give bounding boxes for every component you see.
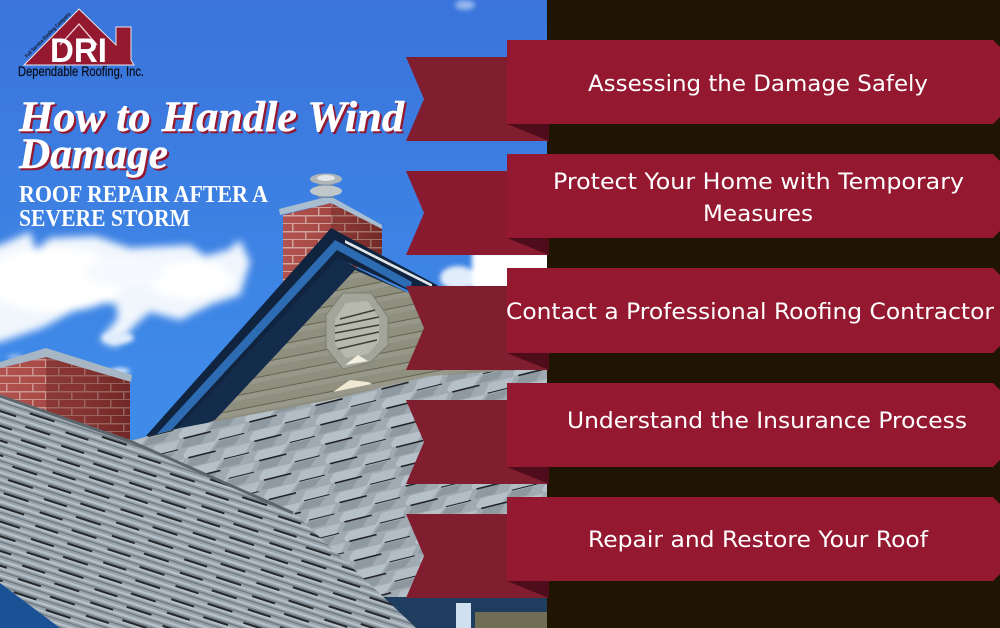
cloud: right of gable [436, 255, 547, 286]
dark right background [547, 0, 1000, 628]
subtitle [19, 182, 269, 232]
ribbon 2: Protect Your Home with Temporary Measures: Measures [703, 202, 813, 227]
chimney: main [279, 174, 382, 282]
logo inner outline [60, 24, 97, 45]
title shadow: How to Handle Wind [20, 96, 408, 143]
gable soffit [176, 258, 408, 429]
logo company name: Dependable Roofing, Inc. [18, 63, 144, 79]
roof: left shingles [0, 395, 416, 628]
title [18, 94, 408, 180]
title shadow [20, 96, 408, 180]
subtitle: ROOF REPAIR AFTER A [19, 182, 269, 208]
ribbon 5: Repair and Restore Your Roof: Repair and Restore Your Roof [588, 528, 929, 553]
wall light patch [333, 380, 372, 392]
logo letters: DRI [50, 32, 107, 70]
ribbon 3: Contact a Professional Roofing Contractor: Contact a Professional Roofing Contractor [506, 300, 995, 325]
ribbon 1: Assessing the Damage Safely [406, 40, 1000, 141]
gable vent [326, 293, 388, 369]
ribbon 2: Protect Your Home with Temporary Measures [406, 154, 1000, 255]
title text: How to Handle Wind [18, 94, 406, 141]
sky [0, 0, 547, 514]
ribbon 1: Assessing the Damage Safely: Assessing the Damage Safely [588, 72, 928, 97]
ribbon 5: Repair and Restore Your Roof [406, 497, 1000, 598]
logo arc tagline: Full Service Roofing Company [24, 11, 72, 59]
title text [18, 94, 406, 178]
logo: Dependable Roofing [18, 9, 144, 79]
cloud: left [0, 232, 250, 347]
downspout [456, 603, 471, 628]
subtitle: SEVERE STORM [19, 206, 190, 232]
blue eave bottom left [0, 583, 60, 628]
logo roof mark [24, 9, 134, 65]
roof: right shingles [125, 368, 547, 597]
cloud: small lower [7, 0, 475, 374]
ribbon 4: Understand the Insurance Process: Understand the Insurance Process [567, 409, 967, 434]
gable blue trim [146, 228, 442, 436]
ribbon 4: Understand the Insurance Process [406, 383, 1000, 484]
title text: Damage [18, 131, 168, 178]
ribbon 3: Contact a Professional Roofing Contractor [406, 268, 1000, 370]
ribbon 2: Protect Your Home with Temporary Measures: Protect Your Home with Temporary [553, 170, 964, 195]
chimney: left [0, 348, 132, 450]
gable wall [208, 267, 517, 423]
photo: roof against blue sky [0, 0, 572, 628]
title shadow: Damage [20, 133, 170, 180]
left roof ridge [0, 396, 293, 513]
soffit below right roof [384, 597, 547, 628]
